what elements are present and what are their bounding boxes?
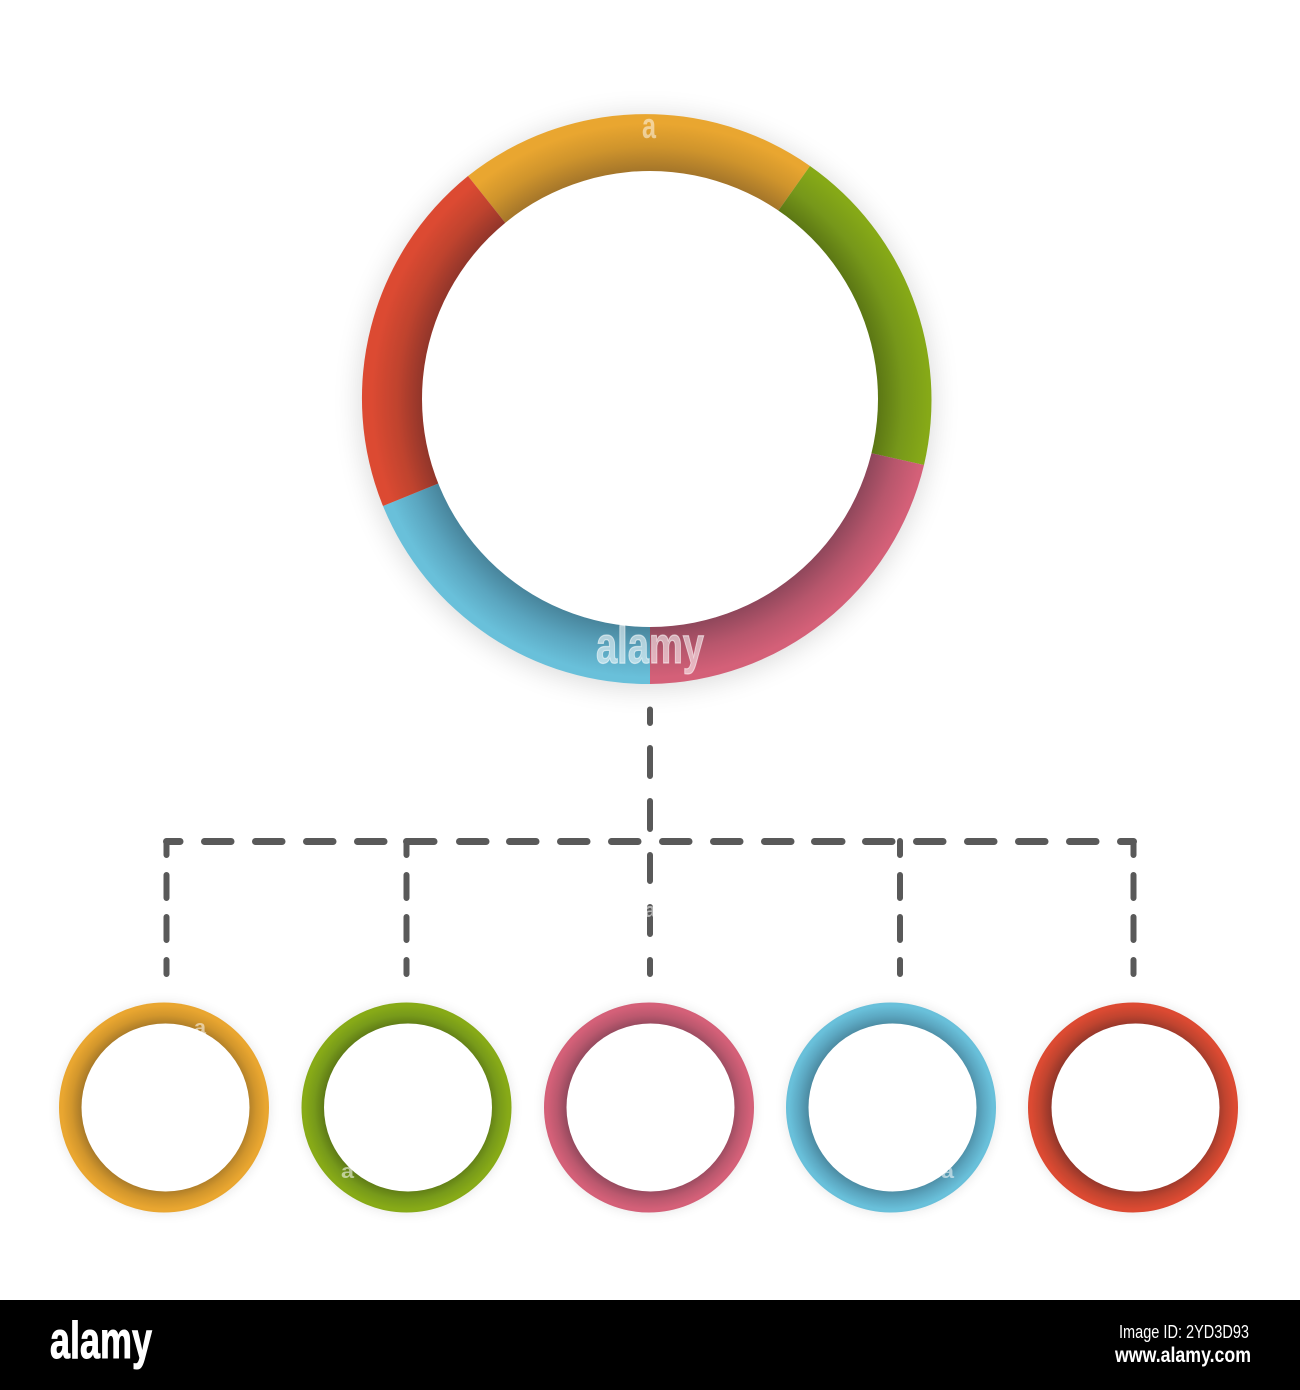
dashed connector tree (166, 710, 1134, 974)
branch: ring 4 (897, 841, 903, 974)
watermark text (194, 105, 955, 1183)
inner white disc (422, 171, 878, 627)
segment: blue (383, 482, 650, 684)
watermark text: a (644, 900, 657, 922)
segment: orange (468, 114, 810, 225)
watermark text: a (941, 1161, 955, 1183)
trunk from main ring (647, 710, 653, 974)
ring 1: orange (59, 1002, 269, 1213)
watermark text: a (194, 1017, 207, 1039)
watermark text: alamy (596, 617, 704, 675)
footer bar (0, 1300, 1300, 1390)
website: www.alamy.com (1114, 1344, 1251, 1367)
ring 2: green (302, 1002, 512, 1213)
horizontal connector (166, 838, 1134, 845)
segment: red (362, 176, 507, 506)
segment: pink (650, 452, 924, 684)
branch: ring 1 (164, 842, 170, 974)
segment: green (776, 166, 931, 465)
ring 4: blue (786, 1002, 996, 1213)
main segmented ring (360, 114, 932, 688)
footer logo: alamy (50, 1312, 152, 1370)
branch: ring 5 (1130, 842, 1136, 974)
branch: ring 2 (404, 842, 410, 974)
watermark text: a (341, 1161, 355, 1183)
watermark text: a (642, 105, 657, 146)
ring 3: pink (544, 1002, 754, 1213)
image id: Image ID: 2YD3D93 (1119, 1322, 1249, 1342)
ring 5: red (1028, 1002, 1238, 1213)
